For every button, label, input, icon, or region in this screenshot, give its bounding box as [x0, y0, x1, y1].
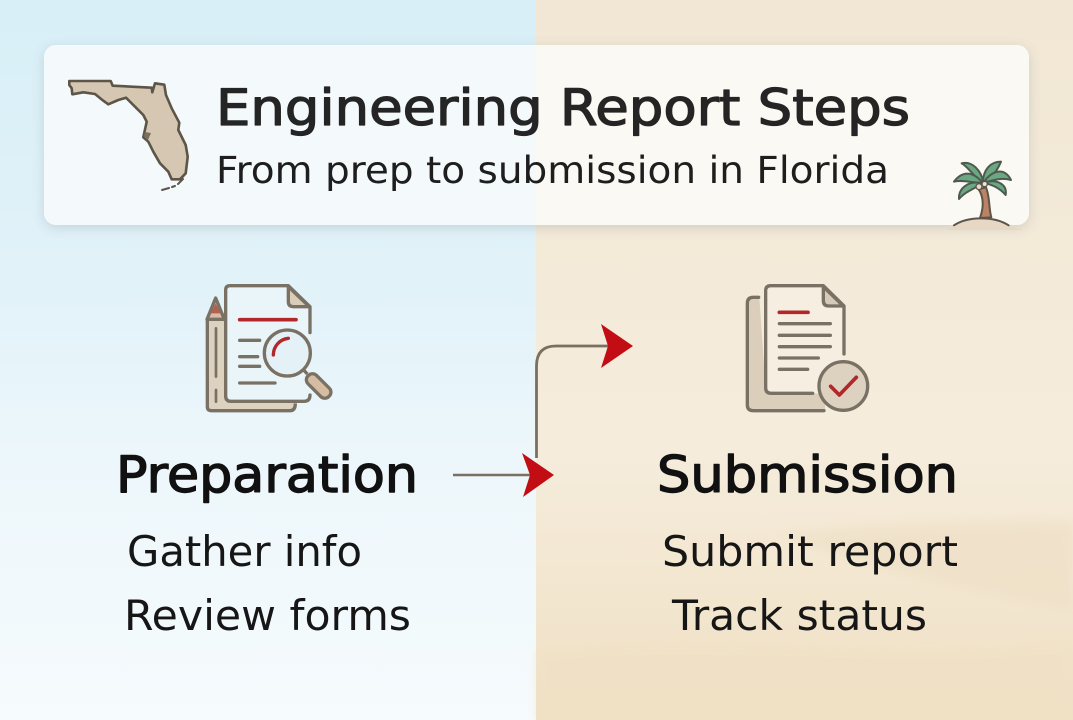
icon: preparation document and magnifier: [207, 286, 333, 411]
text: submit report: Submit report: [662, 527, 958, 576]
icon: submission document with check badge: [747, 286, 868, 411]
subtitle: From prep to submission in Florida: [216, 149, 889, 192]
text: gather info: Gather info: [127, 527, 362, 576]
heading: submission: Submission: [657, 446, 958, 504]
panel: sand background: [536, 0, 1073, 720]
text: track status: Track status: [671, 591, 927, 640]
text: review forms: Review forms: [124, 591, 411, 640]
icon: Florida map: [69, 81, 188, 190]
panel: blue sky background: [0, 0, 536, 720]
icon: palm tree: [947, 162, 1023, 230]
arrow: preparation to submission: [453, 324, 633, 497]
panel: title card: [44, 45, 1029, 230]
title: Engineering Report Steps: [216, 79, 910, 137]
heading: preparation: Preparation: [116, 446, 418, 504]
